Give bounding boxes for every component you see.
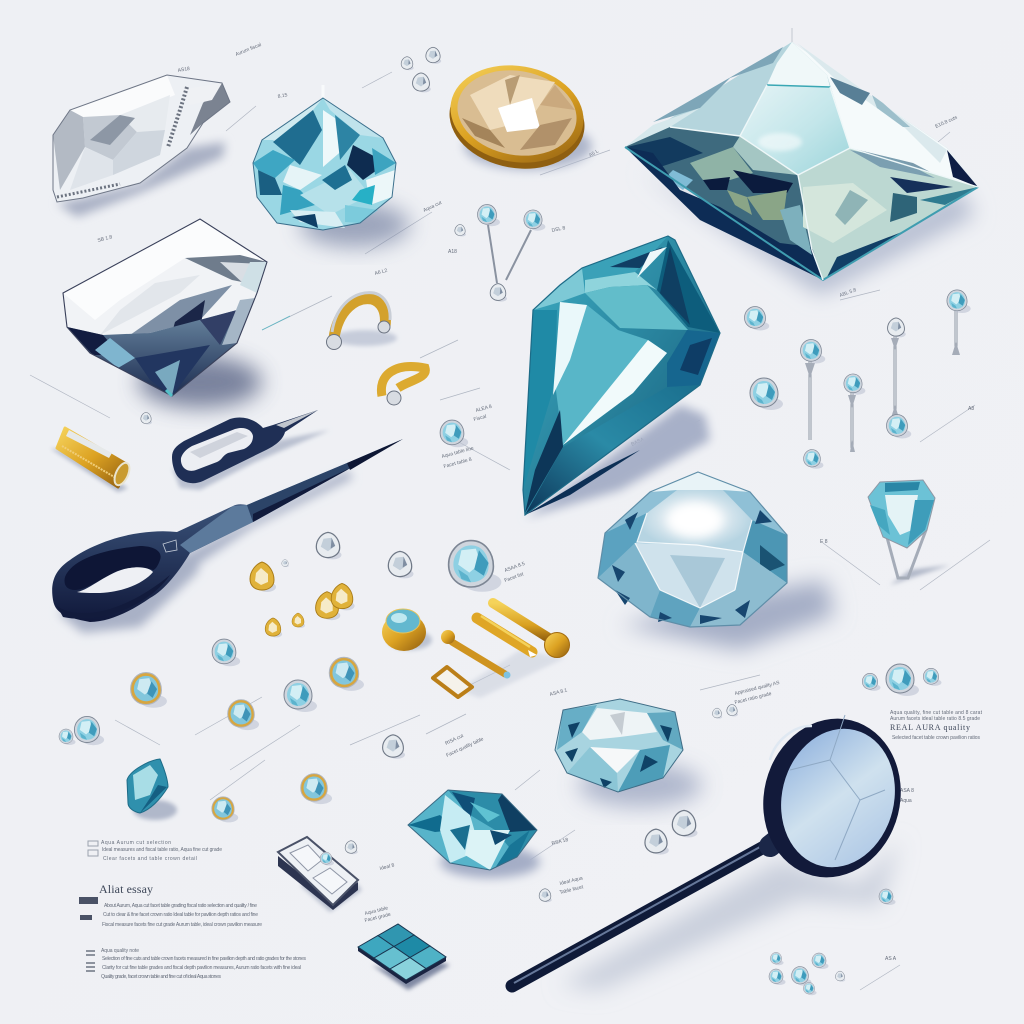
- text block: Aurum quality heading and paragraph: Cut to clear & fine facet crown ratio Ideal table for pavilion depth ratios and fine: [103, 912, 258, 918]
- leader lines and small annotation labels: Appraised quality AS: [734, 680, 781, 697]
- gem: round blue top center: [253, 85, 410, 247]
- text block: right note: Aqua quality, fine cut table and 8 carat: [890, 710, 983, 716]
- tile grid of blue stones: [358, 924, 450, 990]
- text block: right note: Aurum facets ideal table ratio 8.5 grade: [890, 716, 980, 722]
- leader lines and small annotation labels: Ideal Aqua: [559, 875, 584, 887]
- leader lines and small annotation labels: E10.8 cuts: [934, 115, 959, 130]
- leader lines and small annotation labels: ASA 8.1: [549, 687, 568, 698]
- leader lines and small annotation labels: Facet list: [504, 571, 525, 584]
- text block: right note: Selected facet table crown pavilion ratios: [892, 735, 980, 741]
- ring jewellery: [326, 293, 425, 405]
- leader lines and small annotation labels: A18: [448, 249, 457, 255]
- tool: small scissors clip: [172, 410, 330, 490]
- text block: lower note with table icon: Aqua quality note: [101, 948, 139, 954]
- leader lines and small annotation labels: AS A: [885, 956, 897, 962]
- leader lines and small annotation labels: A6 L2: [374, 268, 388, 277]
- leader lines and small annotation labels: Facet table 8: [443, 457, 473, 470]
- leader lines and small annotation labels: Facet ratio grade: [734, 691, 772, 706]
- small jewellery gems: [59, 47, 941, 995]
- tool: silver plate holder: [278, 837, 362, 912]
- gem: pale hexagon: [555, 699, 702, 807]
- leader lines and small annotation labels: Aurum fiscal: [235, 42, 262, 58]
- leader lines and small annotation labels: A5 L: [588, 148, 600, 159]
- leader lines and small annotation labels: Fiscal: [473, 414, 487, 423]
- pendant teal drop: [868, 480, 950, 585]
- text block: right note: [890, 710, 983, 741]
- leader lines and small annotation labels: Aqua cut: [422, 200, 443, 214]
- leader lines and small annotation labels: ASAA 8.5: [504, 561, 526, 574]
- leader lines and small annotation labels: AS18: [177, 66, 191, 74]
- leader lines and small annotation labels: RISA cut: [444, 733, 465, 747]
- gem: small teal left: [127, 759, 177, 820]
- gem: gold-rimmed champagne coin: [442, 55, 592, 179]
- tool: magnifying glass: [512, 704, 917, 990]
- leader lines and small annotation labels: A8: [968, 406, 974, 412]
- leader lines and small annotation labels: Facet grade: [364, 912, 392, 924]
- leader lines and small annotation labels: Aqua table line: [441, 446, 475, 460]
- leader lines and small annotation labels: Facet quality table: [445, 736, 485, 759]
- pendant stick jewellery: [800, 290, 971, 469]
- text block: upper note bottom left: Aqua Aurum cut selection: [101, 840, 171, 846]
- text block: lower note with table icon: Quality grade, facet crown table and fine cut of ideal Aqua stones: [101, 974, 221, 980]
- text block: right note: REAL AURA quality: [890, 723, 970, 732]
- gem: pointed teal kite: [523, 236, 720, 518]
- gem: round clear octagon: [598, 472, 835, 650]
- leader lines and small annotation labels: RSA 18: [551, 837, 569, 847]
- leader lines and small annotation labels: Aqua: [900, 798, 912, 804]
- text block: Aurum quality heading and paragraph: Fiscal measure facets fine cut grade Aurum table, ideal crown pavilion measure: [102, 922, 262, 928]
- leader lines and small annotation labels: DSL 8: [551, 225, 566, 234]
- leader lines and small annotation labels: 8.15: [277, 92, 288, 100]
- tool: large scissors: [52, 439, 403, 633]
- leader lines and small annotation labels: E 8: [820, 539, 828, 545]
- leader lines and small annotation labels: Aqua table: [364, 905, 389, 917]
- text block: lower note with table icon: Selection of fine cuts and table crown facets measured in fine pavilion depth and ratio grades for the stones: [102, 956, 306, 962]
- gem: large aquamarine top right: [625, 28, 978, 295]
- leader lines and small annotation labels: ALEA 8: [475, 404, 493, 414]
- leader lines and small annotation labels: Table facet: [559, 884, 585, 896]
- text block: Aurum quality heading and paragraph: About Aurum, Aqua cut facet table grading fiscal ratio selection and quality / fine: [104, 903, 257, 909]
- leader lines and small annotation labels: BASA: [630, 436, 646, 448]
- leader lines and small annotation labels: SB 1.8: [97, 234, 113, 244]
- gem: clear upper left: [63, 219, 267, 408]
- text block: upper note bottom left: [88, 840, 222, 862]
- leader lines and small annotation labels: ABL 5.8: [839, 287, 857, 299]
- text block: upper note bottom left: Ideal measures and fiscal table ratio, Aqua fine cut grade: [102, 847, 222, 853]
- text block: Aurum quality heading and paragraph: [79, 882, 262, 928]
- tools: gold tweezers and clasps: [382, 603, 570, 698]
- text block: upper note bottom left: Clear facets and table crown detail: [103, 856, 197, 862]
- text block: Aurum quality heading and paragraph: Aliat essay: [99, 882, 153, 896]
- gem: teal hexagon lower: [408, 790, 540, 878]
- leader lines and small annotation labels: Ideal 8: [379, 862, 395, 872]
- text block: lower note with table icon: [86, 948, 306, 980]
- text block: lower note with table icon: Clarity for cut fine table grades and fiscal depth pavilion measures, Aurum ratio facets with fine ideal: [102, 965, 301, 971]
- gem: clear top left with pavé: [53, 75, 230, 217]
- tool: gold cylinder: [50, 428, 133, 492]
- leader lines and small annotation labels: ASA 8: [900, 788, 914, 794]
